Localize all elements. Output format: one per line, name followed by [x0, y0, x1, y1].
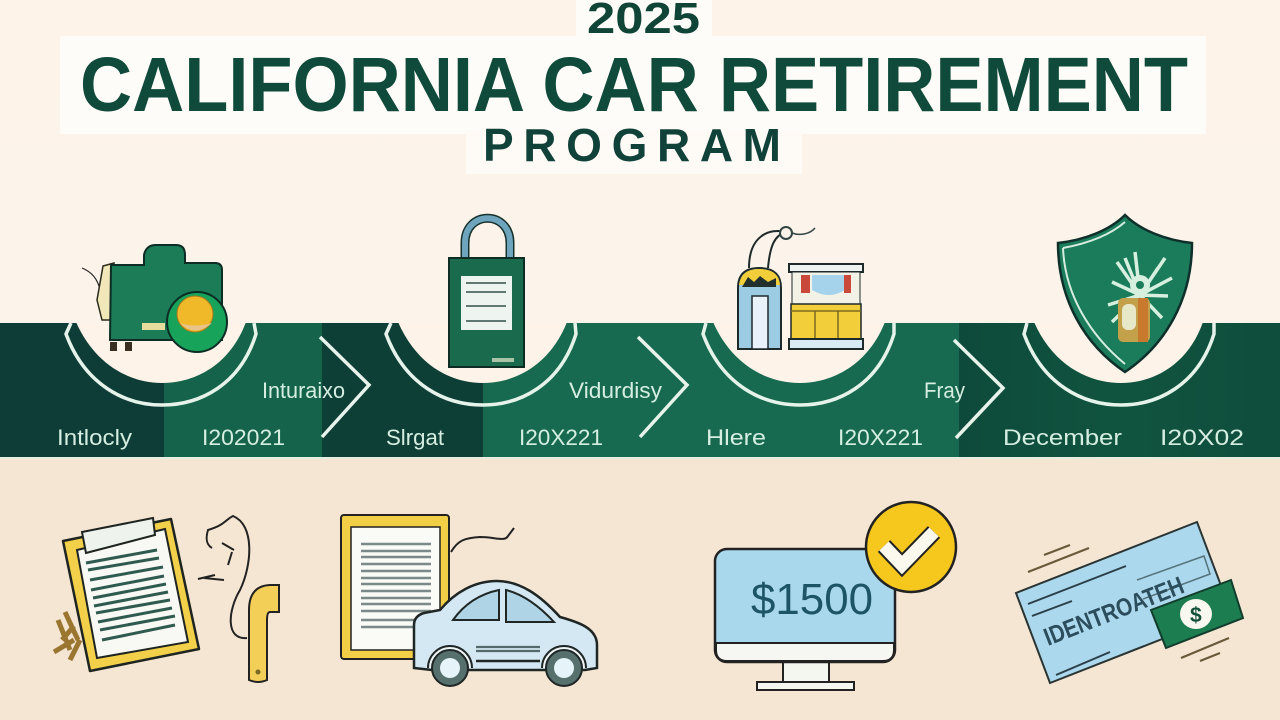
band labels: Hlere — [706, 425, 766, 450]
main title: CALIFORNIA CAR RETIREMENT — [80, 42, 1188, 128]
band labels: Slrgat — [386, 425, 444, 450]
arrow 3 — [954, 340, 1003, 438]
band labels: Vidurdisy — [569, 378, 662, 403]
band labels: Inturaixo — [262, 378, 345, 403]
banknote: $ — [1190, 604, 1202, 627]
band labels: I20X02 — [1160, 425, 1244, 450]
notch 4 — [1024, 322, 1214, 405]
check text: IDENTROATEH — [1040, 572, 1188, 652]
title block — [60, 0, 1206, 174]
band labels: Intlocly — [57, 425, 132, 450]
band labels: I202021 — [202, 425, 285, 450]
icon: charging station and cabinet — [738, 227, 863, 349]
icon: monitor showing amount — [715, 502, 956, 690]
band labels: December — [1003, 425, 1122, 450]
icon: phone handset with cord — [198, 516, 279, 682]
band labels — [57, 378, 1244, 450]
icon: bank check with cash — [1016, 522, 1243, 683]
amount: $1500 — [751, 575, 873, 624]
icon: padlock — [449, 218, 524, 367]
icon: clipboard with form — [54, 518, 199, 671]
icon: tablet document — [341, 515, 514, 659]
arrow 1 — [320, 337, 369, 437]
icon: shield with palm — [1058, 215, 1192, 372]
notch 1 — [66, 322, 256, 405]
icon: car — [414, 581, 597, 686]
band labels: I20X221 — [838, 425, 923, 450]
arrow 2 — [638, 337, 687, 437]
subtitle: PROGRAM — [483, 119, 781, 171]
badge: check mark — [866, 502, 956, 592]
notch 3 — [703, 322, 894, 405]
banknote — [1151, 580, 1243, 648]
band labels: Fray — [924, 378, 965, 403]
icon: circuit board with coin — [82, 245, 227, 352]
notch 2 — [386, 322, 576, 405]
timeline band — [0, 322, 1280, 459]
band labels: I20X221 — [519, 425, 603, 450]
